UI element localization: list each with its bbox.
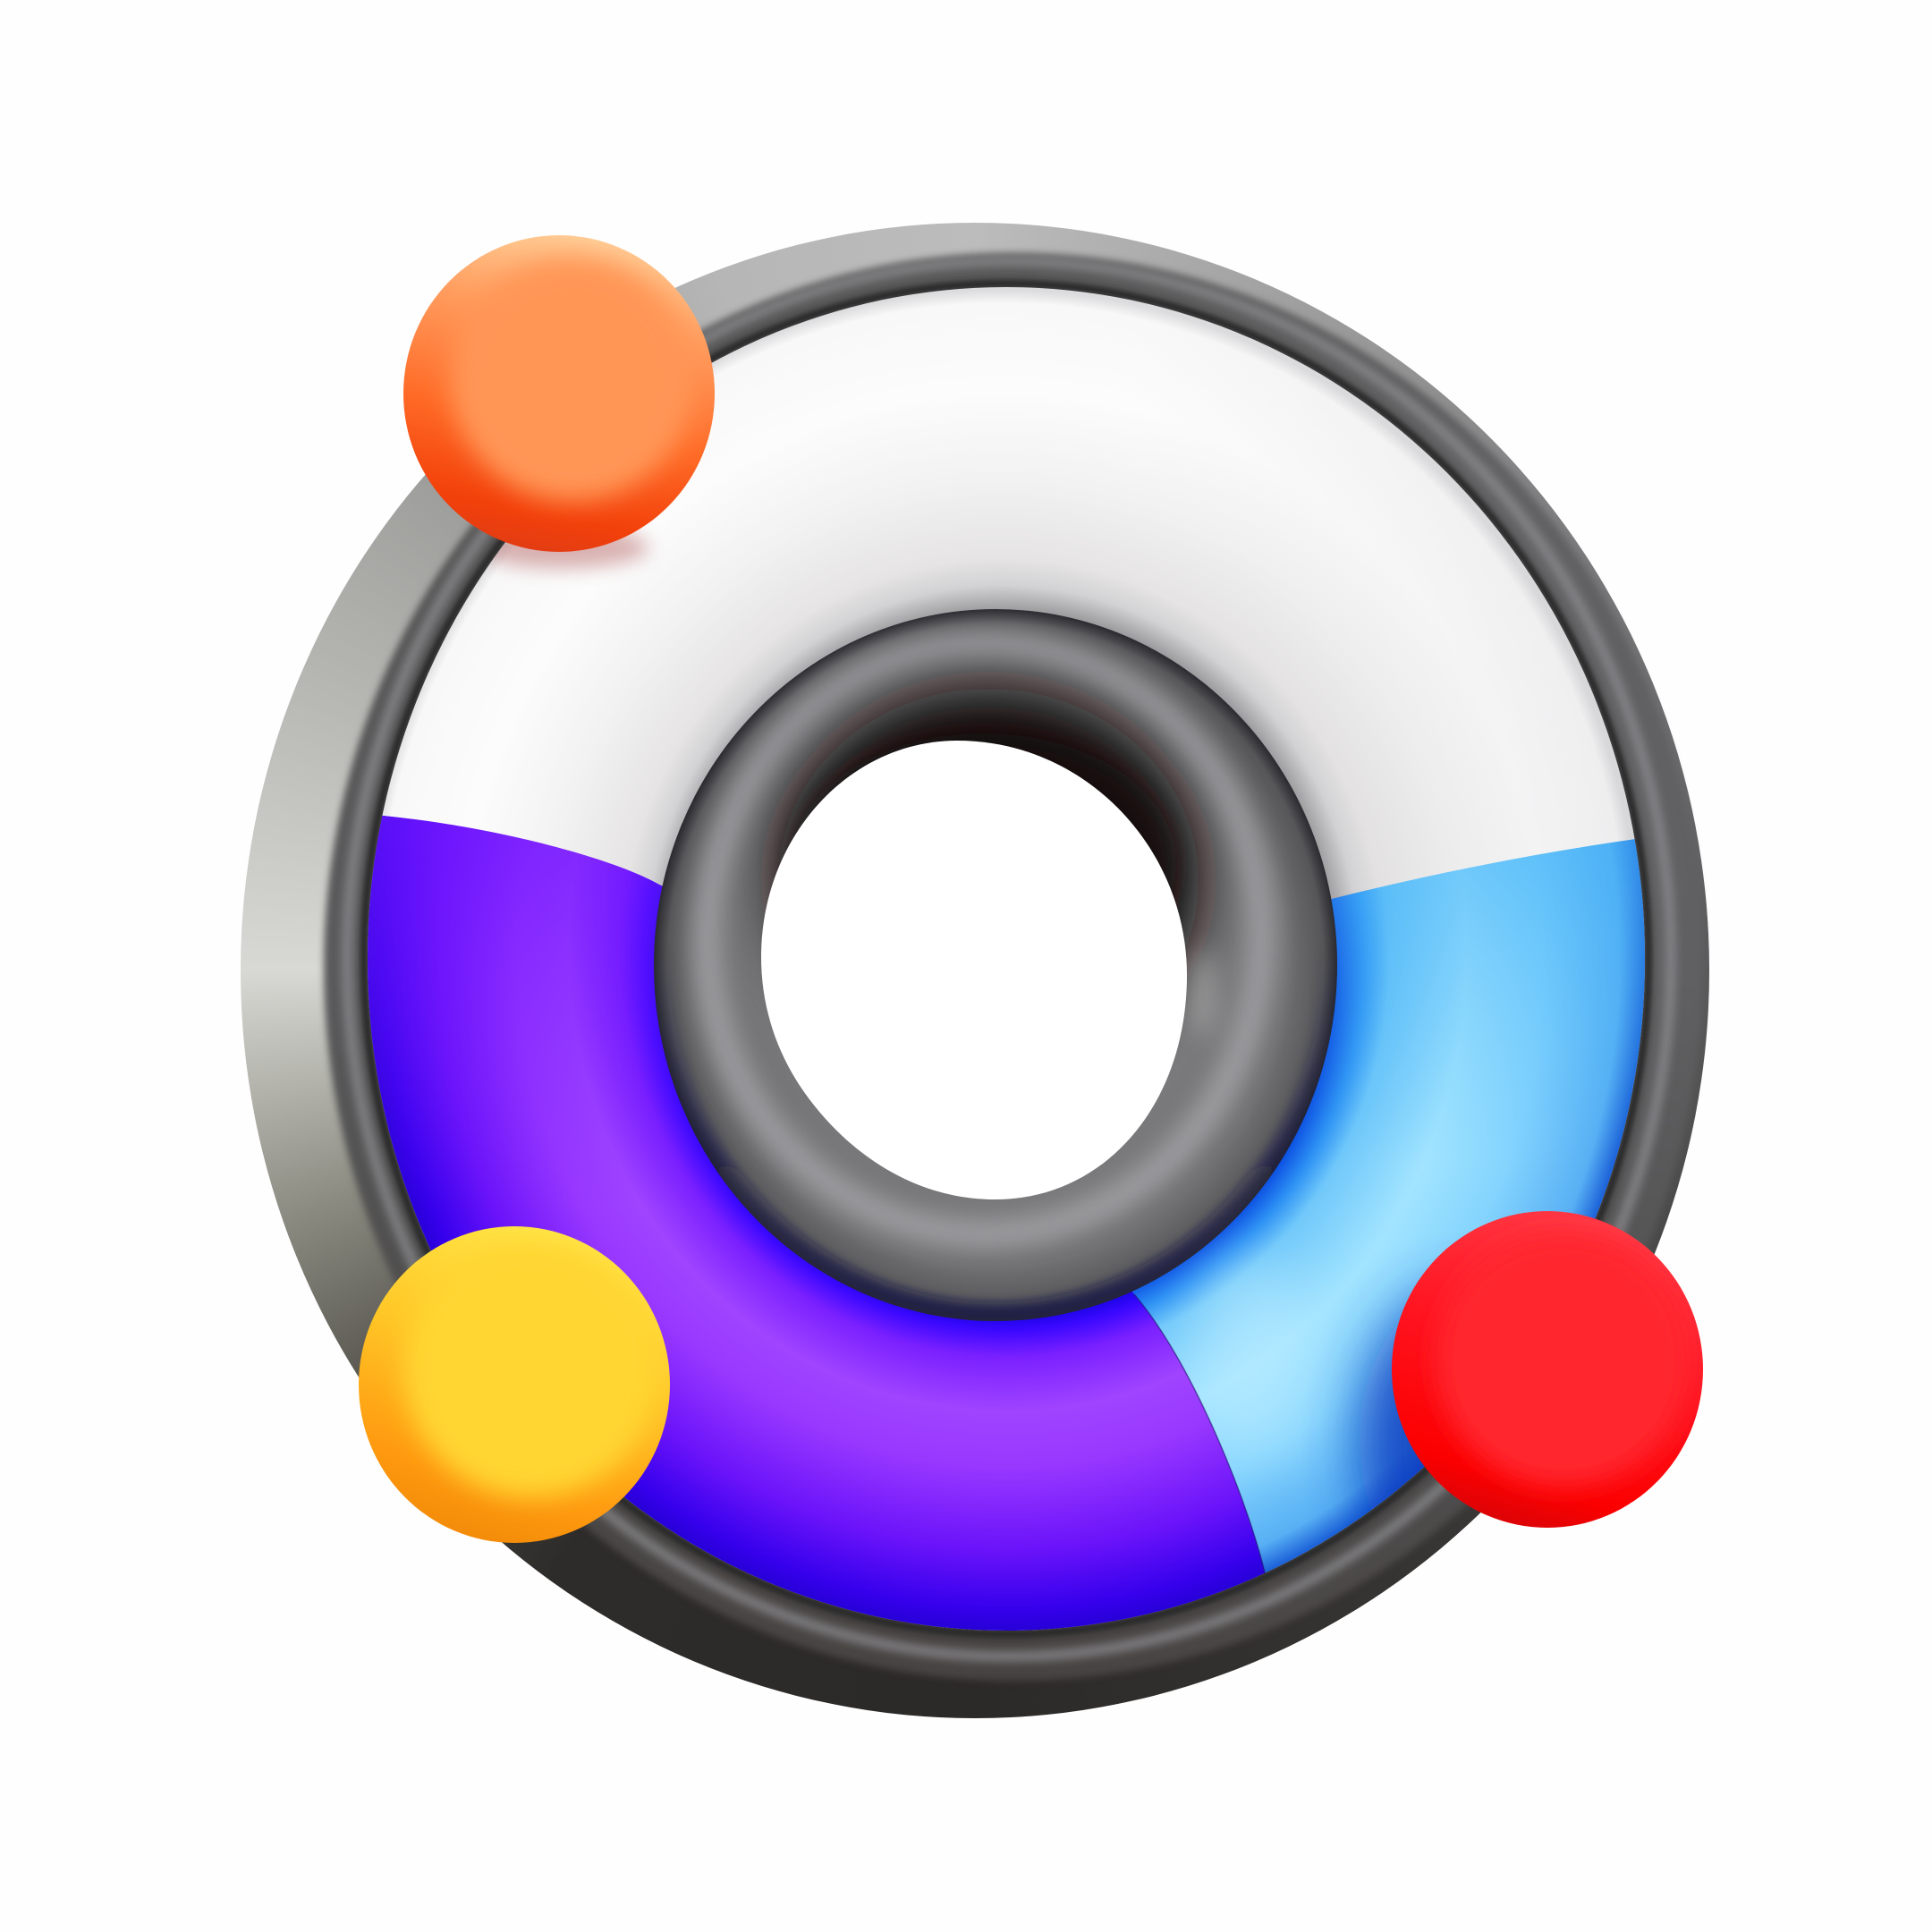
marker: orange (403, 235, 715, 552)
segment: blue (1132, 839, 1645, 1615)
segment: purple (368, 816, 1265, 1631)
marker: yellow (359, 1226, 670, 1543)
segment: white (340, 268, 1664, 1646)
donut chart illustration (338, 235, 1703, 1666)
shadow of orange marker on white segment (479, 526, 648, 569)
centre hole (761, 741, 1187, 1199)
outer metallic shell of the donut (241, 223, 1709, 1718)
shadow of red marker on blue segment (1323, 1258, 1437, 1521)
inner tube ring (654, 609, 1337, 1321)
front tube base ring (324, 253, 1703, 1681)
segment divider line (1134, 1294, 1267, 1584)
marker: red (1392, 1211, 1703, 1528)
donut face segments (368, 287, 1645, 1631)
front tube highlights (347, 261, 1671, 1657)
